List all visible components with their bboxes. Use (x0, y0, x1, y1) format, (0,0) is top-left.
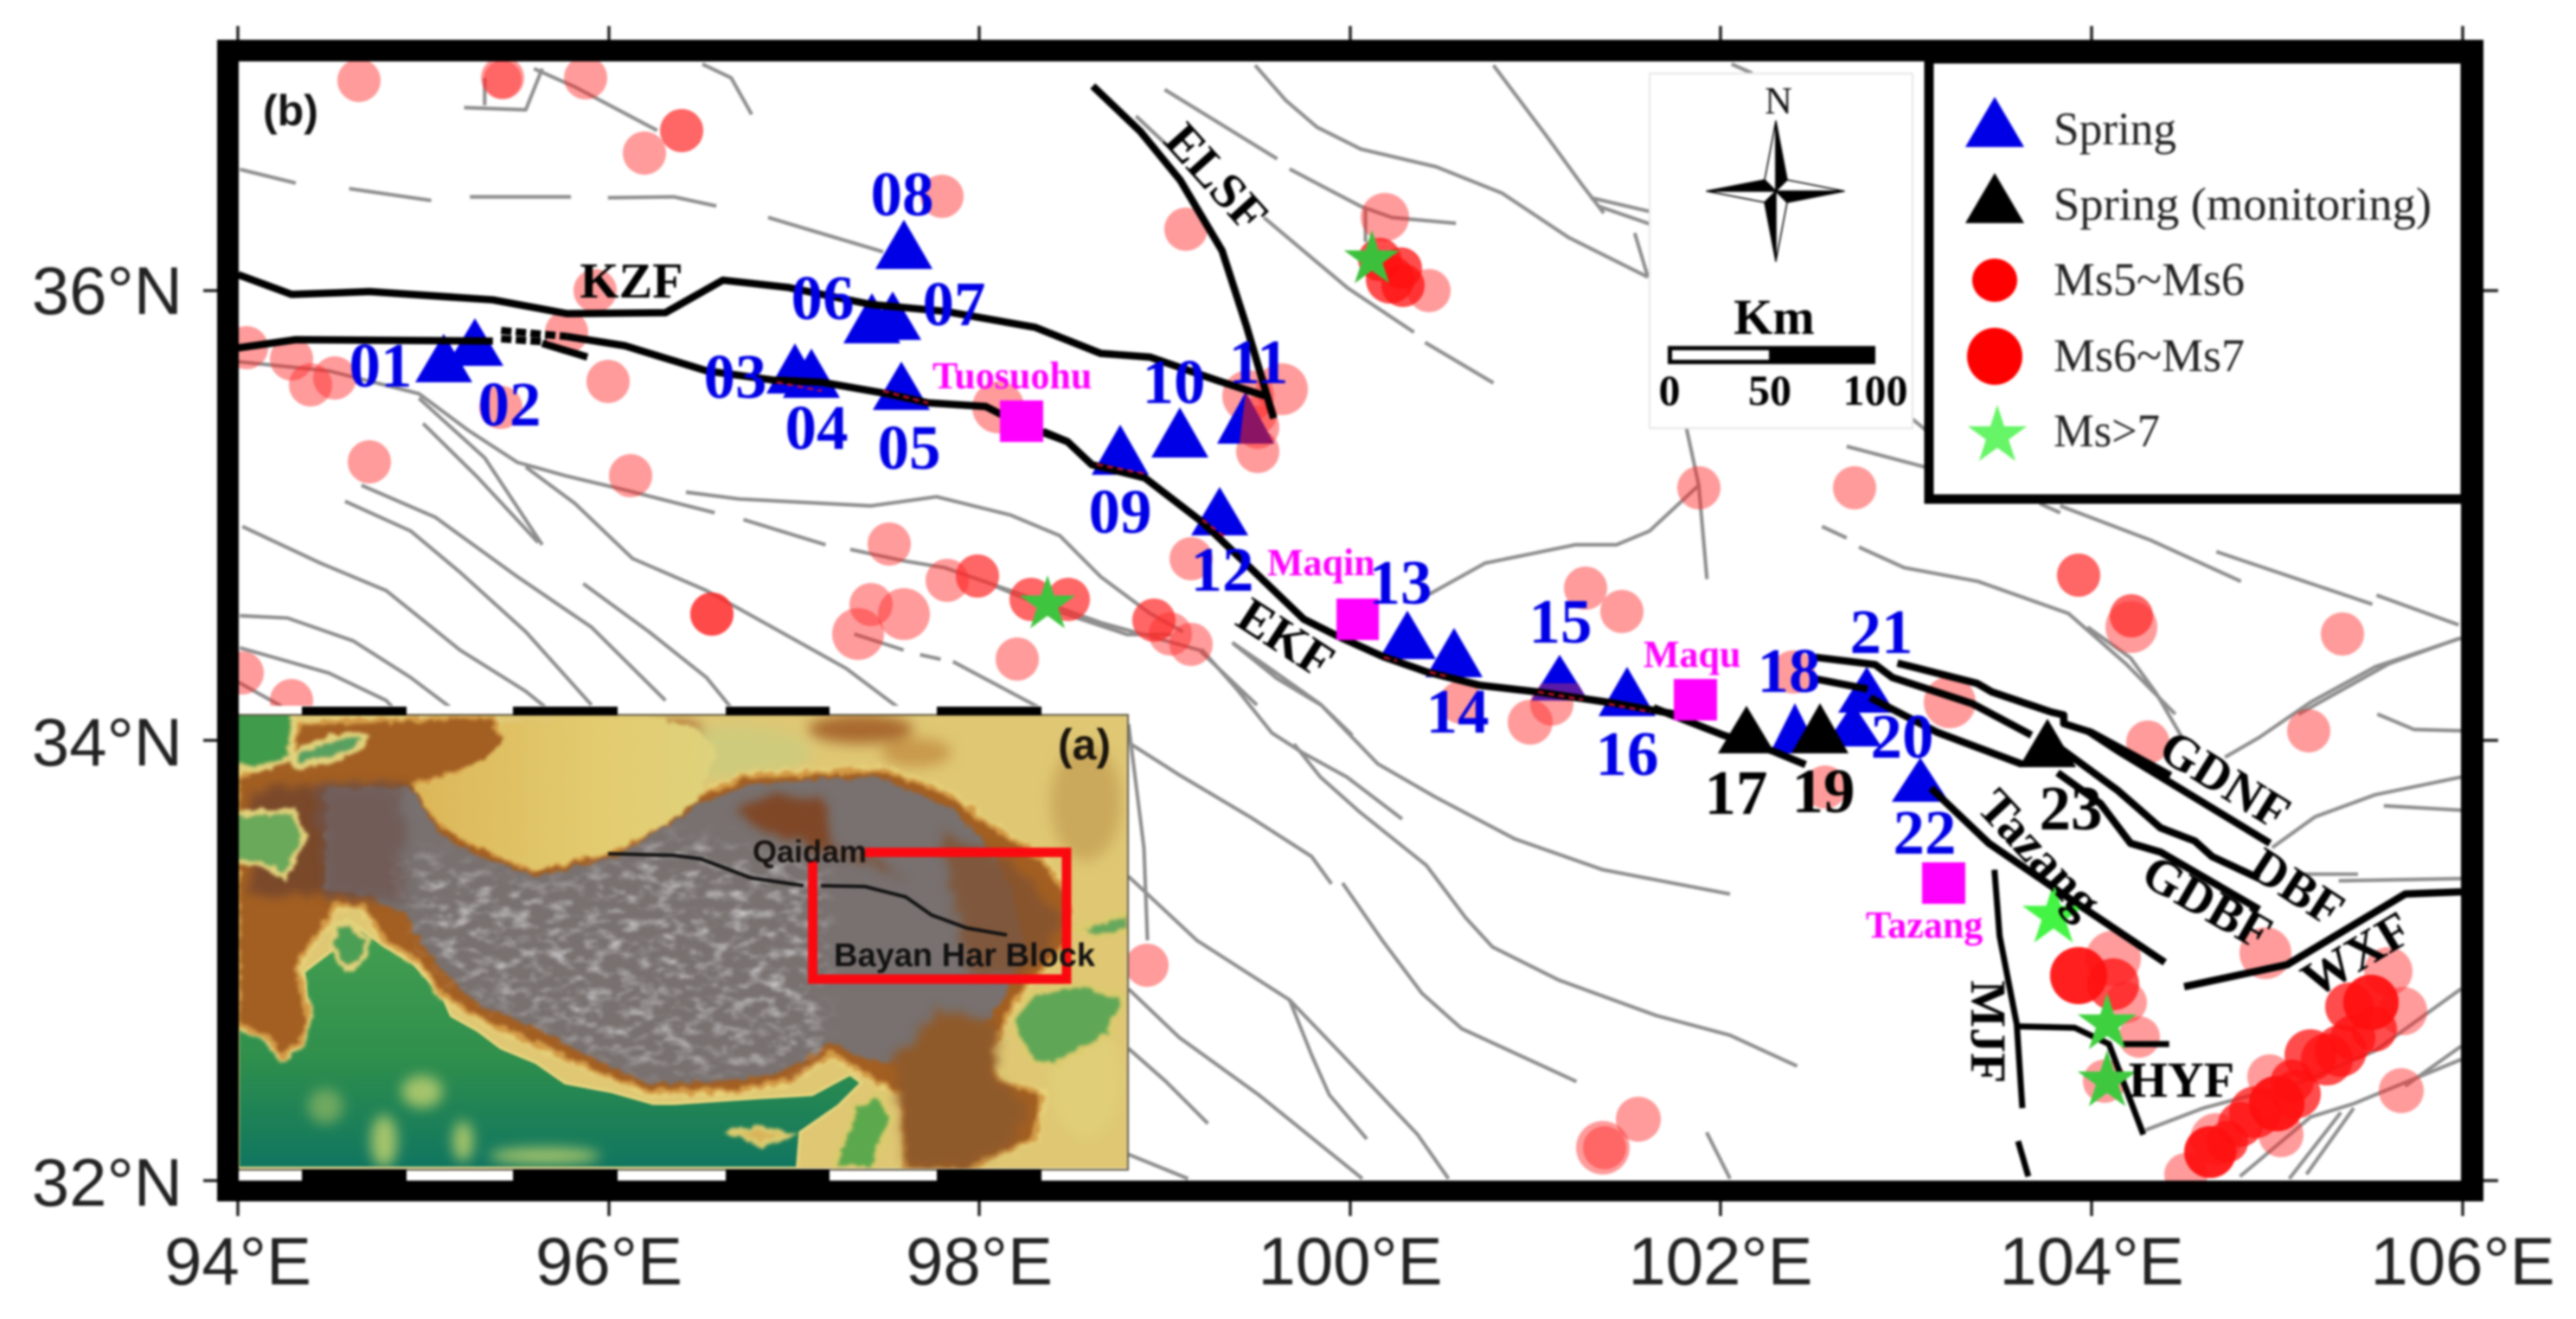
town labels: Maqin (1267, 541, 1375, 584)
terrain: India lowland (238, 919, 862, 1169)
longitude axis labels (164, 1223, 2555, 1299)
inset border (238, 714, 1128, 1169)
spring triangles: monitoring, black (1718, 703, 2076, 767)
spring 15 overlapped by earthquake circle (1531, 683, 1588, 701)
inset fault line east (821, 886, 1007, 935)
fault: EKF (238, 330, 1068, 442)
north label: N (1765, 80, 1792, 122)
spring triangles: blue (415, 220, 1949, 802)
terrain: Sichuan basin and SE lowlands (732, 913, 1130, 1169)
scale bar numbers: 100 (1842, 366, 1908, 414)
spring numbers: 14 (1426, 676, 1490, 746)
fault name labels: Tazang (1967, 778, 2113, 929)
spring numbers: 09 (1088, 477, 1152, 547)
longitude axis labels: 104°E (1999, 1223, 2184, 1299)
spring numbers: 12 (1190, 535, 1254, 605)
fault name labels (580, 112, 2421, 1108)
terrain: Tarim basin (413, 717, 717, 869)
spring numbers: 20 (1870, 701, 1934, 772)
legend: spring monitoring: Spring (monitoring) (2054, 178, 2432, 230)
fault: KZF (238, 275, 1266, 396)
legend: Ms6~Ms7 (1967, 328, 2245, 385)
fault name labels: GDBF (2133, 843, 2282, 962)
spring numbers: 06 (791, 263, 855, 333)
fault: Tazang (1931, 788, 2165, 963)
spring numbers: 08 (870, 159, 934, 229)
magenta town squares (1000, 400, 1965, 904)
terrain: light streaks (401, 837, 823, 1077)
fault: EKF eastern section (1043, 432, 1687, 716)
spring numbers: 19 (1792, 756, 1855, 826)
terrain: brown overlays (314, 784, 1066, 1169)
spring numbers: 18 (1758, 636, 1820, 706)
spring numbers: 13 (1368, 547, 1432, 618)
compass rose (1707, 121, 1844, 261)
terrain: northern basin tint (657, 714, 1125, 863)
fault name labels: DBF (2240, 836, 2355, 938)
longitude axis labels: 96°E (535, 1223, 682, 1299)
spring numbers: 21 (1849, 597, 1913, 667)
spring numbers: 16 (1595, 719, 1659, 789)
spring numbers: 15 (1529, 586, 1592, 656)
inset study-area red box (813, 853, 1067, 979)
inset label: Qaidam: Qaidam (753, 834, 867, 869)
spring numbers: 10 (1142, 347, 1206, 417)
spring numbers: 23 (2040, 773, 2102, 843)
latitude axis labels (32, 253, 183, 1220)
spring numbers: 03 (704, 342, 766, 412)
inset fault line (608, 854, 804, 886)
longitude axis labels: 100°E (1258, 1223, 1443, 1299)
legend: spring (1965, 97, 2176, 155)
spring 11 overlapped by earthquake circle (1240, 392, 1274, 444)
latitude axis labels: 34°N (32, 704, 183, 780)
fault: HYF (2020, 1027, 2169, 1135)
town labels: Maqu (1644, 633, 1740, 676)
terrain: plateau rim and mountains (238, 717, 1069, 1169)
earthquake epicentre circles (221, 56, 2427, 1196)
panel label (b): (b) (263, 86, 318, 135)
spring numbers (349, 159, 2102, 868)
fault: ELSF (1093, 86, 1273, 419)
fault: EKF east to 19 (1654, 708, 1805, 765)
map frame (217, 40, 2483, 1201)
town labels: Tazang (1866, 904, 1983, 946)
fault name labels: KZF (580, 253, 683, 309)
spring numbers: 02 (477, 369, 541, 439)
spring numbers: 07 (922, 269, 986, 339)
scale bar numbers (1659, 366, 1908, 414)
inset scale band (302, 707, 1041, 1182)
spring numbers: 17 (1704, 758, 1768, 828)
latitude axis labels: 32°N (32, 1144, 183, 1220)
legend: Ms5~Ms6: Ms5~Ms6 (2054, 253, 2245, 305)
major black faults (238, 86, 2461, 1176)
terrain: western mountains (250, 784, 407, 896)
inset label: Bayan Har Block: Bayan Har Block (834, 938, 1096, 974)
fault name labels: EKF (1227, 586, 1344, 689)
longitude axis labels: 106°E (2370, 1223, 2555, 1299)
legend: Ms6~Ms7: Ms6~Ms7 (2054, 330, 2245, 381)
main map: secondary grey faults (238, 64, 2461, 1179)
spring numbers: 11 (1229, 327, 1288, 397)
scale bar numbers: 0 (1659, 366, 1680, 414)
fault name labels: WXF (2291, 900, 2421, 1008)
inset map background (238, 706, 1128, 1182)
legend: Ms>7: Ms>7 (2054, 405, 2160, 457)
fault name labels: ELSF (1154, 112, 1279, 243)
terrain: India light patches (308, 1075, 600, 1168)
longitude axis labels: 102°E (1628, 1223, 1813, 1299)
fault: GDNF DBF GDBF strands (2058, 731, 2270, 910)
red traces on EKF (777, 382, 1650, 712)
fault: WXF (2184, 892, 2461, 987)
legend (1929, 59, 2465, 499)
fault name labels: GDNF (2150, 718, 2300, 842)
fault: upper strands from 18 (1816, 657, 2170, 776)
inset (a): topographic map of Tibetan Plateau (232, 707, 1130, 1182)
town labels (932, 355, 1983, 946)
fault name labels: MJF (1960, 980, 2016, 1084)
terrain: western greens (232, 708, 369, 969)
terrain: grey high plateau (325, 778, 1028, 1083)
spring numbers: 01 (349, 330, 412, 400)
compass and scale panel (1650, 74, 1913, 428)
longitude axis labels: 98°E (906, 1223, 1053, 1299)
fault name labels: HYF (2129, 1052, 2234, 1108)
town labels: Tuosuohu (932, 355, 1092, 397)
spring numbers: 04 (785, 393, 848, 463)
inset label: (a): (a) (1058, 720, 1111, 769)
M>7 earthquake stars (1020, 230, 2137, 1106)
scale bar numbers: 50 (1748, 366, 1791, 414)
spring numbers: 05 (877, 413, 941, 483)
legend: spring: Spring (2054, 103, 2176, 155)
scale bar (1668, 346, 1875, 364)
fault: MJF (1995, 870, 2028, 1176)
spring numbers: 22 (1893, 797, 1957, 868)
latitude axis labels: 36°N (32, 253, 183, 329)
km label: Km (1733, 289, 1815, 345)
legend: Ms>7 (1968, 405, 2160, 461)
longitude axis labels: 94°E (164, 1223, 311, 1299)
